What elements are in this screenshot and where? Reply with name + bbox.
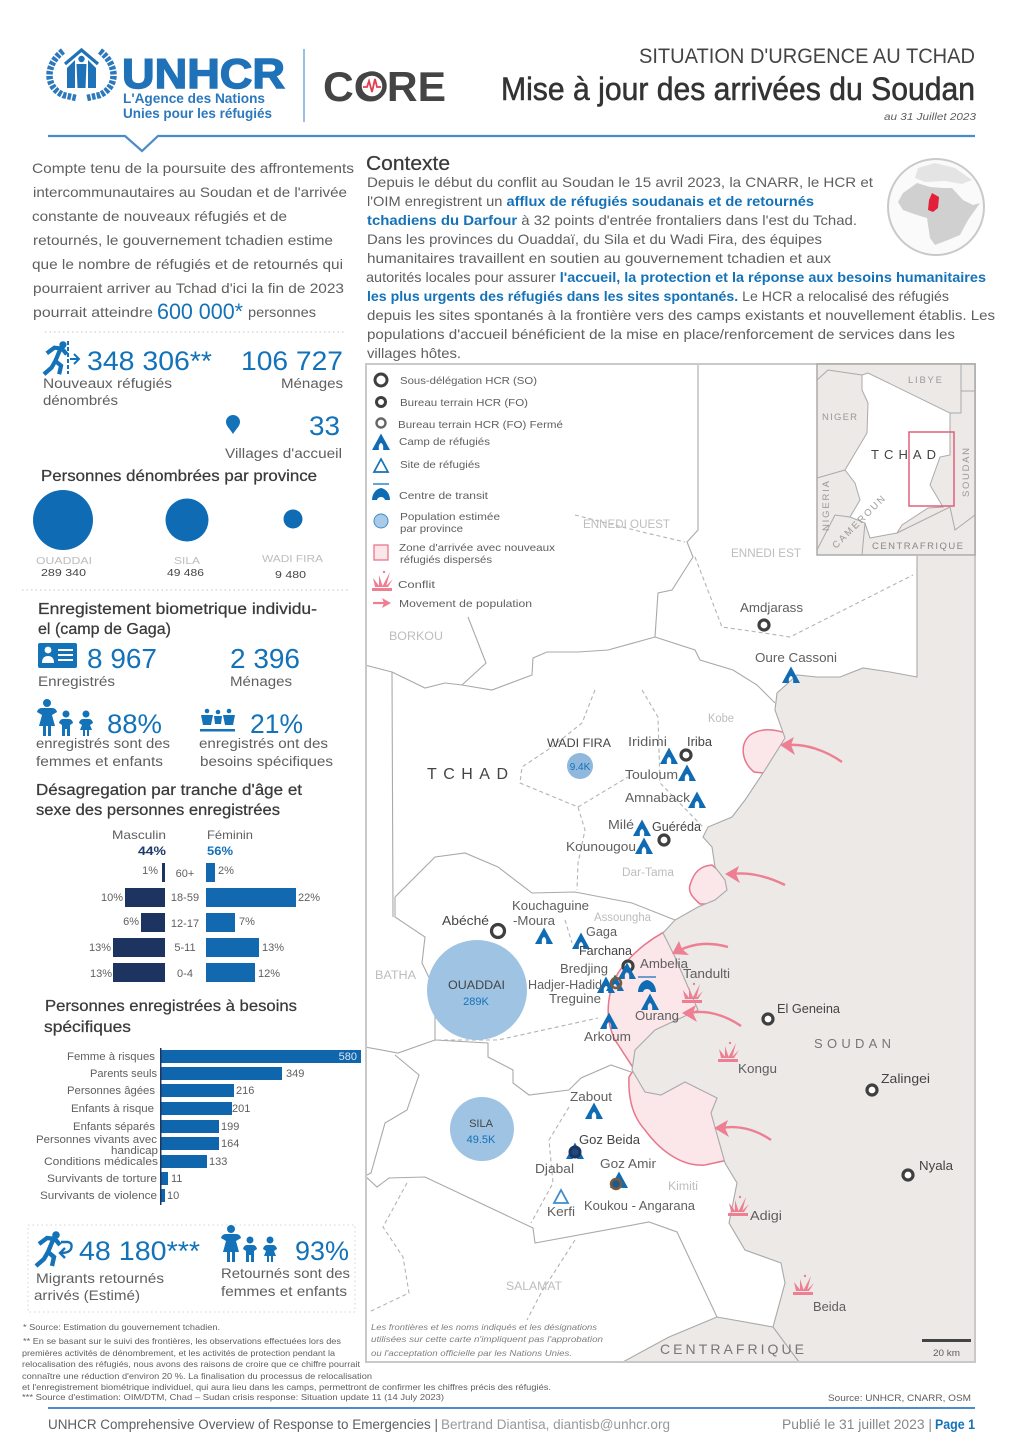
legend	[372, 374, 563, 610]
camp markers	[535, 666, 800, 1203]
icon: UNHCR emblem	[49, 50, 114, 98]
legend item: arrival zone: réfugiés dispersés	[400, 555, 492, 566]
map labels: countries: SOUDAN	[814, 1036, 891, 1051]
map labels: provinces: SALAMAT	[506, 1281, 562, 1293]
map labels: places: Kongu	[738, 1062, 777, 1076]
label: households: Ménages	[281, 376, 343, 391]
map labels: places: Amdjarass	[740, 601, 803, 615]
context heading: Contexte	[366, 153, 450, 175]
map labels: provinces: Dar-Tama	[622, 867, 675, 879]
intro text	[32, 160, 354, 324]
context paragraph: villages hôtes.	[367, 345, 461, 361]
bar chart: Enfants à risque	[71, 1103, 154, 1115]
header divider	[303, 49, 305, 122]
map labels: places: El Geneina	[777, 1002, 840, 1016]
map labels: countries: TCHAD	[427, 766, 508, 783]
legend item: population movement	[373, 598, 532, 610]
date: au 31 Juillet 2023	[884, 111, 976, 123]
map disclaimer: Les frontières et les noms indiqués et les désignations	[371, 1322, 598, 1332]
bubble: Ouaddai	[427, 940, 527, 1040]
map labels: places: Djabal	[535, 1162, 574, 1176]
bar chart: Survivants de torture	[47, 1173, 157, 1185]
province borders	[365, 364, 775, 1317]
heading line 2: el (camp de Gaga)	[38, 621, 171, 638]
population pyramid: 7%	[239, 916, 255, 928]
inset labels: NIGERIA	[821, 480, 832, 531]
map labels: countries	[427, 766, 891, 1357]
bubble: Sila	[450, 1097, 514, 1161]
value: Wadi Fira: 9 480	[275, 569, 306, 581]
context paragraph: autorités locales pour assurer l'accueil, la protection et la réponse aux besoins humanitaires	[366, 269, 986, 285]
Sudan and neighbouring territory	[621, 556, 975, 1363]
bar chart: Femme à risques	[67, 1051, 156, 1063]
map labels: places: Kouchaguine	[512, 899, 589, 913]
map labels: places: Gaga	[586, 925, 617, 939]
scale bar	[922, 1339, 971, 1359]
label: registered: Enregistrés	[38, 674, 115, 689]
label: women and children line 1: enregistrés sont des	[36, 736, 170, 751]
label: line 1: Retournés sont des	[221, 1265, 350, 1281]
footnotes: premières activités de dénombrement, et les activités de protection pendant la	[22, 1348, 335, 1358]
label: returnees line 1: Migrants retournés	[36, 1270, 164, 1286]
label: returnees line 2: arrivés (Estimé)	[34, 1287, 140, 1303]
map labels: provinces: Assoungha	[594, 912, 652, 924]
map labels: places: Zalingei	[881, 1072, 930, 1086]
panel: specific needs chart	[36, 998, 361, 1205]
legend item: conflict	[372, 571, 435, 591]
value: Sila: 49 486	[167, 567, 204, 579]
logo tagline: L'Agence des Nations	[123, 91, 265, 106]
icon: women and children	[221, 1225, 277, 1262]
map labels: places: Goz Amir	[600, 1157, 656, 1171]
context paragraph: l'OIM enregistrent un afflux de réfugiés soudanais et de retournés	[367, 193, 814, 209]
legend item: population	[374, 512, 500, 535]
map disclaimer: utilisées sur cette carte n'impliquent pas l'approbation	[371, 1334, 603, 1344]
map labels: places: Nyala	[919, 1159, 953, 1173]
label: new refugees: Nouveaux réfugiés	[43, 376, 172, 391]
logo wordmark: UNHCR	[122, 50, 285, 97]
bar chart	[36, 1048, 361, 1205]
bubble: Sila: SILA	[469, 1118, 494, 1130]
bubble: Sila: 49.5K	[467, 1134, 496, 1146]
legend item: population movement: Movement de population	[399, 599, 532, 610]
country border	[621, 556, 917, 1363]
map labels: places: Iridimi	[628, 735, 667, 749]
footnotes: relocalisation des réfugiés, nous avons des raisons de croire que ce chiffre pourrait	[22, 1359, 361, 1369]
value: Ouaddai: 289 340	[41, 567, 86, 579]
population pyramid: 12%	[258, 968, 280, 980]
label: counted: dénombrés	[43, 393, 118, 408]
legend item: refugee camp	[372, 434, 490, 450]
department borders	[369, 515, 913, 1320]
map labels: places: Tandulti	[683, 967, 730, 981]
context paragraph	[366, 174, 995, 361]
footnotes: *** Source d'estimation: OIM/DTM, Chad – Sudan crisis response: Situation update 11 (14 July 2023)	[22, 1392, 444, 1402]
title block	[501, 45, 976, 123]
heading line 2: sexe des personnes enregistrées	[36, 802, 280, 819]
figure: new refugees: 348 306**	[87, 346, 213, 376]
heading line 1: Personnes enregistrées à besoins	[45, 998, 297, 1015]
intro text: pourraient arriver au Tchad d'ici la fin de 2023	[33, 280, 344, 296]
context paragraph: Depuis le début du conflit au Soudan le 15 avril 2023, la CNARR, le HCR et	[367, 174, 873, 190]
map labels: provinces: Kimiti	[668, 1181, 698, 1193]
label: Sila: SILA	[174, 555, 200, 567]
population pyramid: 22%	[298, 892, 320, 904]
legend item: refugee site: Site de réfugiés	[400, 460, 480, 471]
map labels: places: Abéché	[442, 914, 489, 928]
conflict icons	[682, 983, 814, 1295]
legend item: closed office	[376, 418, 563, 431]
bubble: Wadi Fira	[567, 753, 593, 779]
label: women and children line 2: femmes et enfants	[36, 754, 163, 769]
footnotes: et l'enregistrement biométrique individuel, qui aura lieu dans les camps, permettront de confirmer les chiffres précis des réfugiés.	[22, 1382, 551, 1392]
legend item: transit centre: Centre de transit	[399, 491, 488, 502]
divider dots	[22, 589, 350, 591]
bar chart: Conditions médicales	[44, 1156, 159, 1168]
icon: new refugees	[44, 341, 79, 374]
panel: returnees	[28, 1225, 355, 1312]
legend item: conflict: Conflit	[398, 580, 435, 591]
map labels: places: Ourang	[635, 1009, 679, 1023]
figure: specific needs share: 21%	[250, 709, 303, 739]
icon: location pin	[226, 415, 240, 434]
footnotes: connaître une réduction d'environ 20 %. La finalisation du processus de relocalisation	[22, 1371, 372, 1381]
population pyramid: 60+	[176, 868, 194, 880]
map labels: places: Iriba	[687, 735, 712, 749]
inset labels: NIGER	[822, 412, 857, 423]
inset labels: CAMEROUN	[830, 494, 888, 551]
logo tagline second line: Unies pour les réfugiés	[123, 106, 272, 121]
context paragraph: depuis les sites spontanés à la frontière vers des camps existants et nouvellement établis. Les	[367, 307, 995, 323]
legend: female: Féminin	[207, 828, 253, 842]
pink arrival zones	[608, 730, 790, 1165]
label: line 2: femmes et enfants	[221, 1283, 347, 1299]
dotted box	[28, 1225, 355, 1312]
bar chart: 11	[171, 1173, 182, 1185]
map labels: places: WADI FIRA	[547, 738, 611, 750]
context paragraph: Dans les provinces du Ouaddaï, du Sila et du Wadi Fira, des équipes	[367, 231, 822, 247]
map labels: places: Zabout	[570, 1090, 613, 1104]
map labels: places: Ambelia	[640, 957, 688, 971]
map labels: places: Beida	[813, 1300, 846, 1314]
footer: Publié le 31 juillet 2023 |	[782, 1417, 932, 1432]
inset labels: CENTRAFRIQUE	[872, 541, 963, 552]
population pyramid: 2%	[218, 865, 234, 877]
intro text: 600 000*	[157, 299, 243, 324]
icon: women and children	[37, 699, 93, 736]
header rule with chevron	[48, 136, 975, 151]
population pyramid: 13%	[262, 942, 284, 954]
map labels: places: Oure Cassoni	[755, 651, 837, 665]
CORE logo: CORE	[323, 63, 446, 110]
inset labels: TCHAD	[871, 447, 936, 462]
bar chart: Parents seuls	[90, 1068, 157, 1080]
figure: returnees: 48 180***	[79, 1236, 201, 1266]
footer: Page 1	[935, 1417, 975, 1432]
map labels: places: -Moura	[513, 914, 555, 928]
legend item: transit centre	[372, 484, 488, 502]
map labels: places: Arkoum	[584, 1030, 631, 1044]
proportional circle: Wadi Fira	[284, 510, 302, 528]
map labels: places: Hadjer-Hadid	[528, 978, 602, 992]
bar chart: Survivants de violence	[40, 1190, 157, 1202]
province population bubbles	[427, 753, 593, 1161]
context paragraph: les plus urgents des réfugiés dans les sites spontanés. Le HCR a relocalisé des réfugiés	[367, 288, 949, 304]
intro text: retournés, le gouvernement tchadien estime	[33, 232, 333, 248]
figure: registered: 8 967	[87, 643, 157, 674]
map labels: provinces: BATHA	[375, 970, 416, 982]
inset labels: LIBYE	[908, 375, 942, 386]
map frame	[366, 364, 975, 1362]
heading line 1: Désagregation par tranche d'âge et	[36, 782, 303, 799]
map labels: places: Farchana	[579, 944, 632, 958]
legend item: refugee camp: Camp de réfugiés	[399, 437, 490, 448]
bar chart: Personnes âgées	[67, 1085, 156, 1097]
footer	[48, 1417, 975, 1432]
bar chart: Personnes vivants avec	[36, 1134, 158, 1146]
label: host villages: Villages d'accueil	[225, 446, 342, 461]
legend item: population: Population estimée	[400, 512, 500, 523]
bubble: Ouaddai: 289K	[463, 996, 490, 1008]
label: Wadi Fira: WADI FIRA	[262, 553, 323, 565]
context paragraph: populations d'accueil bénéficient de la mise en place/renforcement de services dans les	[367, 326, 955, 342]
map labels: provinces: BORKOU	[389, 631, 443, 643]
intro text: pourrait atteindre	[33, 304, 153, 320]
panel: key figures	[43, 341, 343, 461]
bar chart: 580	[339, 1051, 357, 1063]
map labels: places	[442, 601, 953, 1314]
legend item: sub-office	[375, 374, 537, 387]
map disclaimer	[371, 1322, 603, 1358]
office markers	[492, 620, 913, 1180]
panel: persons by province	[33, 468, 323, 581]
map labels: places: Koukou - Angarana	[584, 1199, 695, 1213]
proportional circle: Ouaddai	[33, 490, 93, 550]
intro text: que le nombre de réfugiés et de retournés qui	[32, 256, 343, 272]
intro text: constante de nouveaux réfugiés et de	[32, 208, 287, 224]
context paragraph: tchadiens du Darfour à 32 points d'entrée frontaliers dans l'est du Tchad.	[367, 212, 857, 228]
context paragraph: humanitaires travaillent en soutien au gouvernement tchadien et aux	[367, 250, 831, 266]
label: Ouaddai: OUADDAI	[36, 555, 92, 567]
bar chart: Enfants séparés	[73, 1121, 156, 1133]
figure: households: 106 727	[241, 346, 343, 376]
map labels: places: Guéréda	[652, 820, 701, 834]
main title: Mise à jour des arrivées du Soudan	[501, 71, 975, 107]
map labels: provinces: ENNEDI EST	[731, 548, 801, 560]
heading line 2: spécifiques	[44, 1019, 131, 1036]
bar chart: 216	[236, 1085, 254, 1097]
label: households: Ménages	[230, 674, 292, 689]
divider dots	[45, 331, 345, 333]
legend item: refugee site	[374, 459, 480, 472]
population pyramid: 12-17	[171, 918, 199, 930]
legend: male share: 44%	[138, 844, 166, 858]
map labels: places: Adigi	[750, 1209, 782, 1223]
figure: women and children among returnees: 93%	[295, 1236, 349, 1266]
population pyramid: 13%	[89, 942, 111, 954]
bubble: Ouaddai: OUADDAI	[448, 980, 505, 992]
label: specific needs line 2: besoins spécifiques	[200, 754, 333, 769]
population pyramid: 18-59	[171, 892, 199, 904]
intro text: Compte tenu de la poursuite des affrontements	[32, 160, 354, 176]
legend item: population: par province	[400, 524, 463, 535]
legend item: closed office: Bureau terrain HCR (FO) Fermé	[398, 420, 563, 431]
heading: Personnes dénombrées par province	[41, 468, 317, 485]
map labels: places: Kounougou	[566, 840, 636, 854]
inset highlight	[909, 432, 954, 506]
map labels: places: Treguine	[549, 992, 601, 1006]
legend item: arrival zone: Zone d'arrivée avec nouveaux	[399, 543, 555, 554]
map labels: places: Amnaback	[625, 791, 691, 805]
bar chart: 164	[221, 1138, 239, 1150]
population pyramid: 6%	[123, 916, 139, 928]
inset locator map	[817, 364, 975, 555]
map labels: provinces	[375, 519, 801, 1293]
bubble: Wadi Fira: 9.4K	[570, 762, 591, 773]
legend item: sub-office: Sous-délégation HCR (SO)	[400, 376, 537, 387]
footnotes	[22, 1322, 551, 1402]
bar chart: 201	[232, 1103, 250, 1115]
map labels: places: Milé	[608, 818, 634, 832]
icon: specific needs	[200, 709, 235, 732]
population pyramid: 5-11	[174, 942, 196, 954]
footnotes: ** En se basant sur le suivi des frontières, les observations effectuées lors des	[23, 1336, 341, 1346]
bar chart: 199	[221, 1121, 239, 1133]
header: UNHCR logo	[49, 50, 285, 121]
footnotes: * Source: Estimation du gouvernement tchadien.	[23, 1322, 220, 1332]
bar chart: 349	[286, 1068, 304, 1080]
figure: households: 2 396	[230, 643, 300, 674]
intro text: intercommunautaires au Soudan et de l'arrivée	[33, 184, 347, 200]
panel: age and sex breakdown	[36, 782, 320, 982]
movement arrows	[672, 737, 842, 1140]
footer rule	[48, 1407, 975, 1409]
map labels: places: Goz Beida	[579, 1133, 640, 1147]
population pyramid: 1%	[142, 865, 158, 877]
footer: UNHCR Comprehensive Overview of Response to Emergencies |	[48, 1417, 438, 1432]
label: specific needs line 1: enregistrés ont des	[199, 736, 328, 751]
population pyramid: 13%	[90, 968, 112, 980]
map disclaimer: ou l'acceptation officielle par les Nations Unies.	[371, 1348, 572, 1358]
panel: biometric registration	[36, 601, 333, 769]
map	[365, 364, 975, 1363]
icon: ID card	[38, 643, 77, 668]
population pyramid: 10%	[101, 892, 123, 904]
bar chart: handicap	[111, 1145, 158, 1157]
bar chart: 10	[167, 1190, 179, 1202]
map base	[365, 364, 975, 1363]
population pyramid: 0-4	[177, 968, 193, 980]
footer: Bertrand Diantisa, diantisb@unhcr.org	[441, 1417, 670, 1432]
legend: female share: 56%	[207, 844, 233, 858]
icon: returnee runner	[36, 1231, 72, 1266]
bar chart: 133	[209, 1156, 227, 1168]
population pyramid	[89, 863, 320, 982]
map labels: provinces: Kobe	[708, 713, 734, 725]
scale bar: 20 km	[933, 1348, 960, 1359]
figure: women and children share: 88%	[107, 709, 162, 739]
overline title: SITUATION D'URGENCE AU TCHAD	[639, 45, 975, 68]
inset labels: SOUDAN	[961, 448, 972, 497]
intro text: personnes	[248, 304, 316, 320]
figure: host villages: 33	[309, 411, 340, 441]
map labels: places: Touloum	[625, 768, 678, 782]
map labels: provinces: ENNEDI OUEST	[583, 519, 670, 531]
legend item: arrival zone	[374, 543, 555, 566]
legend: male: Masculin	[112, 828, 166, 842]
map labels: places: Kerfi	[547, 1205, 575, 1219]
legend item: field office: Bureau terrain HCR (FO)	[400, 398, 528, 409]
icon: globe locator	[888, 159, 984, 255]
map source: Source: UNHCR, CNARR, OSM	[828, 1393, 971, 1404]
map labels: countries: CENTRAFRIQUE	[660, 1341, 804, 1357]
proportional circle: Sila	[166, 498, 208, 542]
inset labels	[821, 375, 972, 552]
map labels: places: Bredjing	[560, 962, 608, 976]
heading line 1: Enregistement biometrique individu-	[38, 601, 317, 618]
